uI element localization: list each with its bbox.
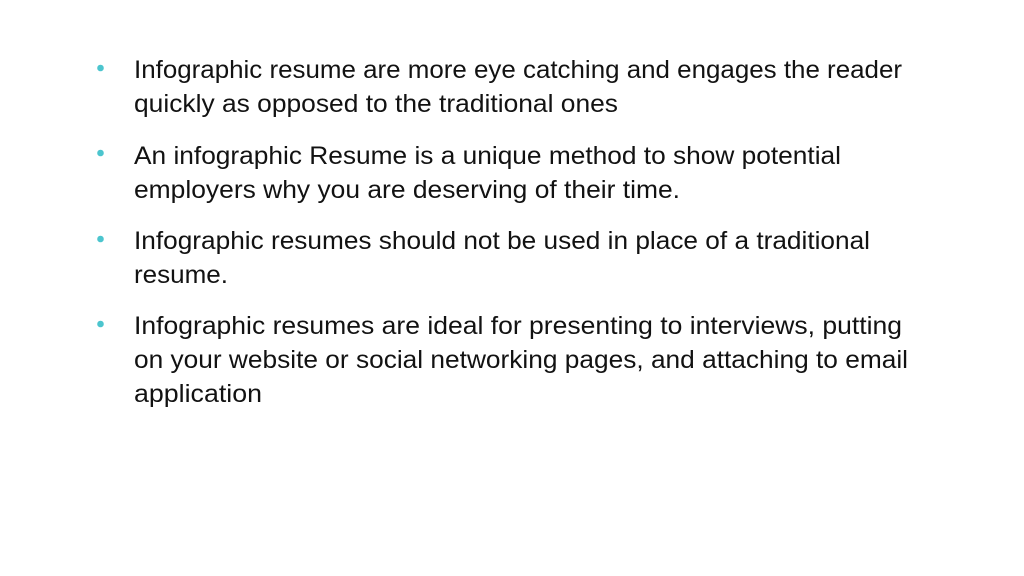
- text block 2: [134, 142, 841, 204]
- text block 1: quickly as opposed to the traditional ones: [134, 90, 618, 118]
- bullet marker 4: [97, 321, 104, 327]
- bullet marker 1: [97, 65, 104, 71]
- text block 4: application: [134, 380, 262, 408]
- bullet marker 3: [97, 236, 104, 242]
- text block 4: Infographic resumes are ideal for presenting to interviews, putting: [134, 312, 902, 340]
- bullet item 2: [97, 142, 841, 204]
- bullet item 1: [97, 56, 902, 118]
- text block 4: on your website or social networking pages, and attaching to email: [134, 346, 908, 374]
- text block 2: employers why you are deserving of their time.: [134, 176, 680, 204]
- text block 1: [134, 56, 902, 118]
- text block 2: An infographic Resume is a unique method to show potential: [134, 142, 841, 170]
- text block 1: Infographic resume are more eye catching and engages the reader: [134, 56, 902, 84]
- text block 4: [134, 312, 908, 408]
- bullet item 4: [97, 312, 908, 408]
- bullet marker 2: [97, 150, 104, 156]
- text block 3: [134, 227, 870, 289]
- bullet item 3: [97, 227, 870, 289]
- text block 3: resume.: [134, 261, 228, 289]
- text block 3: Infographic resumes should not be used in place of a traditional: [134, 227, 870, 255]
